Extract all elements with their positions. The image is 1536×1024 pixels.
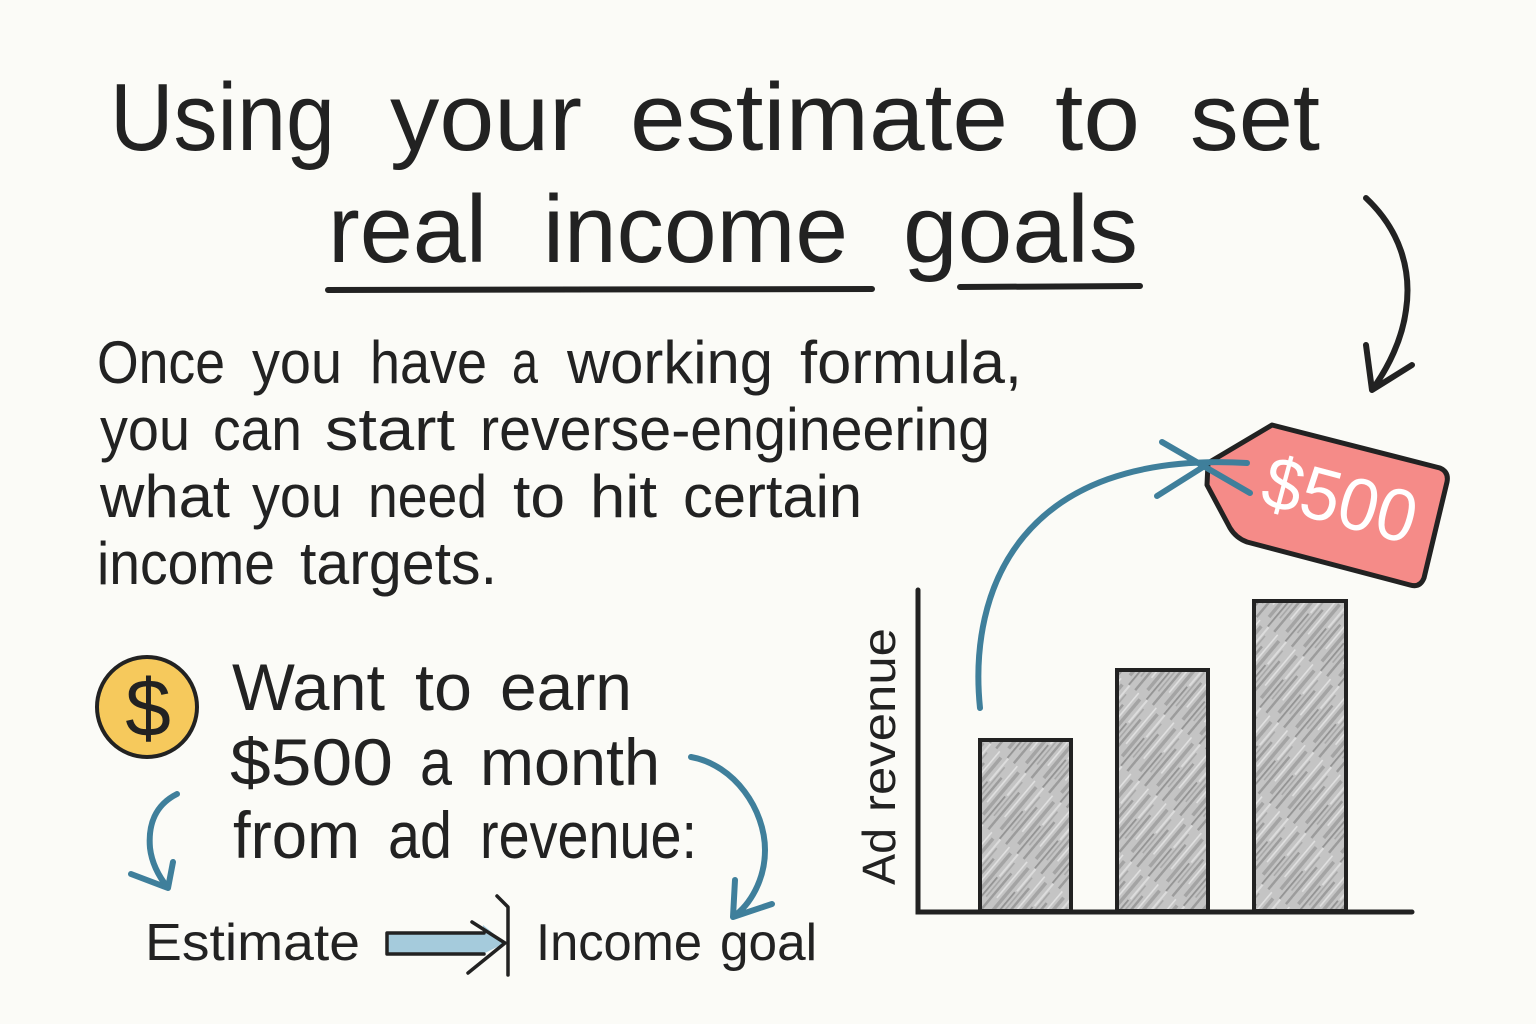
- intro paragraph: you: [100, 396, 190, 463]
- y axis label: Ad: [853, 828, 905, 885]
- goal statement: from: [233, 798, 360, 872]
- arrow: estimate to income goal: [387, 896, 508, 975]
- bar 2: [1117, 670, 1208, 911]
- goal statement: to: [415, 650, 472, 724]
- arrow: bar to price tag: [978, 442, 1250, 708]
- intro paragraph: targets.: [300, 530, 497, 597]
- icon: dollar coin: [97, 657, 197, 757]
- label: income goal: goal: [720, 914, 817, 972]
- title: estimate: [630, 64, 1008, 171]
- intro paragraph: income: [97, 530, 275, 597]
- arrow: down to estimate: [131, 794, 177, 888]
- intro paragraph: start: [325, 396, 455, 463]
- price tag: $500: [1254, 439, 1426, 560]
- icon: dollar coin: $: [125, 663, 171, 754]
- goal statement: ad: [388, 798, 452, 872]
- intro paragraph: reverse-engineering: [480, 396, 990, 463]
- goal statement: a: [420, 725, 452, 799]
- goal statement: earn: [500, 650, 632, 724]
- intro paragraph: a: [512, 329, 538, 396]
- goal statement: revenue:: [480, 798, 697, 872]
- intro paragraph: have: [370, 329, 487, 396]
- intro paragraph: formula,: [800, 329, 1022, 396]
- label: income goal: Income: [536, 914, 702, 972]
- axes: [918, 590, 1412, 912]
- intro paragraph: Once: [97, 329, 225, 396]
- goal statement: Want: [232, 650, 385, 724]
- title: your: [390, 64, 582, 171]
- title: income: [543, 176, 848, 283]
- label: estimate: Estimate: [145, 914, 360, 972]
- price tag: [1207, 425, 1447, 586]
- intro paragraph: to: [513, 463, 565, 530]
- intro paragraph: hit: [590, 463, 657, 530]
- title: to: [1055, 64, 1140, 171]
- y axis label: [853, 628, 905, 885]
- title: [110, 64, 1320, 290]
- goal statement: month: [480, 725, 660, 799]
- title: goals: [903, 176, 1138, 283]
- title: Using: [110, 64, 335, 171]
- arrow: down to income goal: [691, 757, 772, 917]
- goal statement: [230, 650, 697, 872]
- y axis label: revenue: [853, 628, 905, 812]
- arrow: top right pointing to tag: [1366, 198, 1412, 390]
- intro paragraph: can: [213, 396, 302, 463]
- bar 3: [1254, 601, 1346, 911]
- title: set: [1190, 64, 1320, 171]
- intro paragraph: [97, 329, 1022, 597]
- goal statement: $500: [230, 725, 393, 799]
- label: income goal: [536, 914, 817, 972]
- title: real: [328, 176, 487, 283]
- intro paragraph: what: [99, 463, 230, 530]
- intro paragraph: you: [252, 329, 342, 396]
- intro paragraph: certain: [683, 463, 862, 530]
- intro paragraph: working: [566, 329, 773, 396]
- bar chart: [853, 590, 1412, 912]
- bar 1: [980, 740, 1071, 911]
- intro paragraph: you: [252, 463, 342, 530]
- intro paragraph: need: [368, 463, 487, 530]
